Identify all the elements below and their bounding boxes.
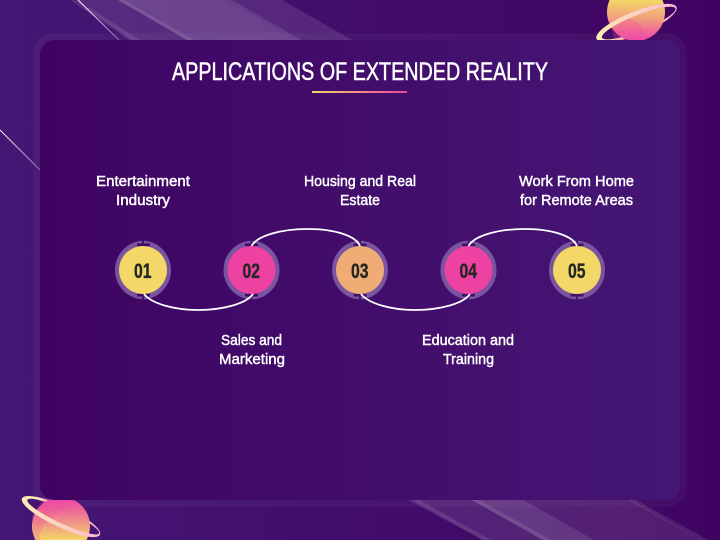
label: Housing and Real Estate: Estate — [340, 192, 380, 209]
label: Entertainment Industry — [96, 173, 191, 209]
label: Work From Home for Remote Areas — [519, 173, 634, 209]
node 02 — [226, 243, 277, 297]
bottom diagonal light streaks — [400, 496, 708, 540]
label: Sales and Marketing — [219, 332, 285, 368]
label: Work From Home for Remote Areas: for Remote Areas — [520, 192, 633, 209]
label: Education and Training: Training — [443, 351, 494, 368]
icon: planet bottom left — [22, 496, 100, 540]
title: APPLICATIONS OF EXTENDED REALITY — [172, 58, 548, 86]
connector 01 to 02 — [144, 294, 253, 310]
title underline — [312, 91, 407, 93]
node 02: 02 — [242, 260, 260, 283]
node 05: 05 — [568, 260, 586, 283]
node 04: 04 — [460, 260, 477, 283]
node 03: 03 — [351, 260, 368, 283]
label: Housing and Real Estate: Housing and Real — [304, 173, 416, 190]
label: Education and Training: Education and — [422, 332, 514, 349]
main panel — [40, 40, 680, 500]
label: Entertainment Industry: Entertainment — [96, 173, 191, 190]
node 04 — [443, 243, 494, 297]
label: Housing and Real Estate — [304, 173, 416, 209]
node 03 — [335, 243, 385, 297]
node 05 — [552, 243, 602, 297]
label: Work From Home for Remote Areas: Work From Home — [519, 173, 634, 190]
label: Entertainment Industry: Industry — [116, 192, 171, 209]
label: Sales and Marketing: Marketing — [219, 351, 285, 368]
thin white shooting-star lines — [0, 0, 119, 170]
label: Sales and Marketing: Sales and — [221, 332, 282, 349]
connector 02 to 03 — [252, 229, 360, 246]
icon: planet top right — [596, 0, 677, 40]
top diagonal light streaks — [70, 0, 356, 42]
label: Education and Training — [422, 332, 514, 368]
connector 03 to 04 — [361, 294, 470, 310]
node 01: 01 — [134, 260, 152, 283]
node 01 — [118, 243, 168, 297]
connector 04 to 05 — [468, 229, 577, 246]
panel glow — [33, 33, 687, 507]
